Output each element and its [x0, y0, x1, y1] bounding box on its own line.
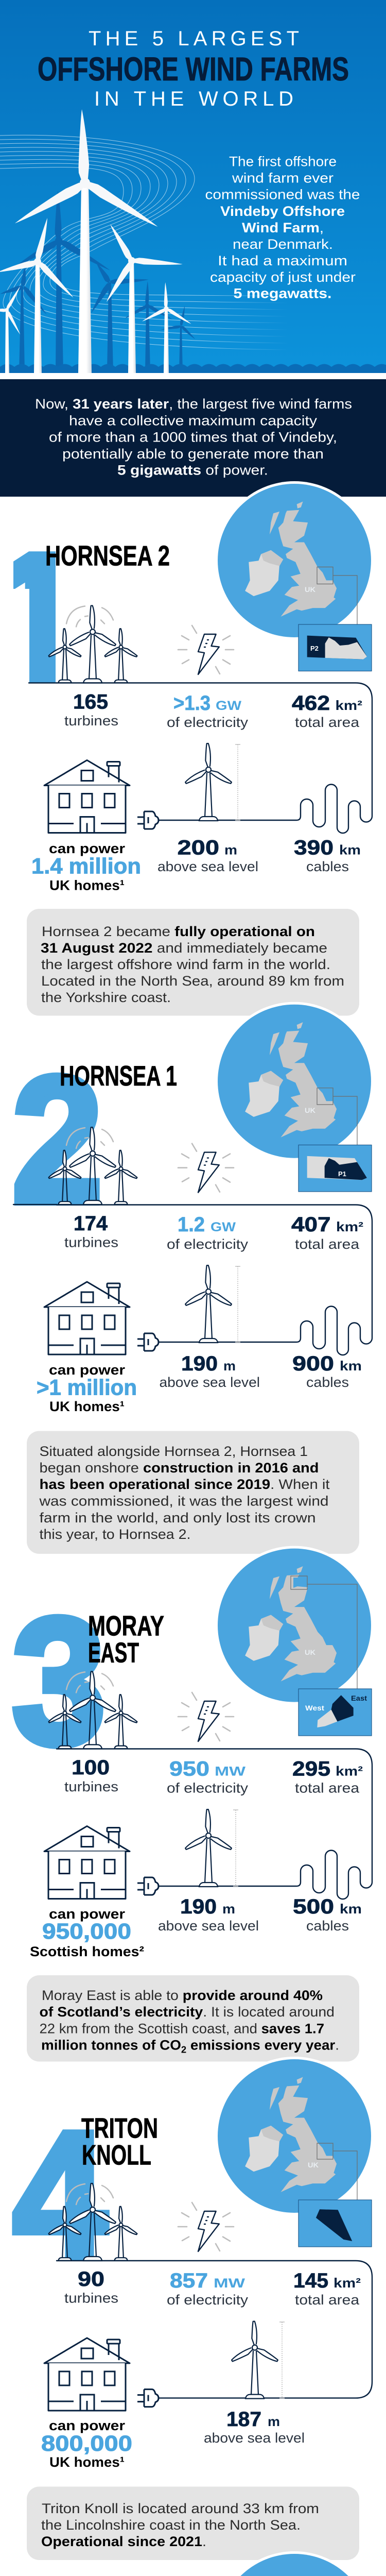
section 3: Moray East	[12, 1546, 374, 1959]
icon: single turbine with height bar	[184, 1809, 238, 1887]
hero text: first offshore wind farm: Vindeby Offshore	[220, 204, 345, 219]
icon: plug	[137, 1333, 159, 1351]
stat: height: above sea level	[160, 1375, 260, 1390]
hero text: first offshore wind farm: The first offshore	[229, 154, 337, 169]
intro text: have a collective maximum capacity	[69, 413, 318, 429]
map: Netherlands	[240, 2551, 348, 2576]
stat: area	[292, 1758, 363, 1796]
text box: Moray East: 2	[181, 2045, 186, 2055]
top line	[13, 1204, 57, 1205]
big numeral 2: 2	[12, 1039, 103, 1241]
icon: lightning	[178, 1692, 234, 1741]
text box: Triton Knoll: Operational since 2021 .	[41, 2534, 206, 2549]
icon: plug	[137, 1877, 159, 1895]
stat: turbines: 90	[78, 2268, 104, 2291]
text box: Hornsea 2: the Yorkshire coast.	[41, 990, 171, 1005]
text box: Moray East: .	[335, 2038, 339, 2053]
icon: turbines	[48, 1671, 138, 1749]
hero text: first offshore wind farm: commissioned was the	[205, 187, 360, 202]
section 1: Hornsea 2	[0, 481, 374, 893]
text box: Hornsea 2	[27, 909, 359, 1016]
stat: turbines	[64, 2268, 118, 2306]
stat: cables: cables	[306, 1375, 349, 1390]
stat: homes: 1.4 million	[31, 854, 141, 878]
text box: Hornsea 2: Hornsea 2 became fully operational on	[42, 924, 315, 939]
hero text: first offshore wind farm: capacity of just under	[210, 269, 356, 285]
icon: lightning	[178, 1144, 234, 1193]
map: UK: UK	[305, 585, 315, 594]
stat: cables: km	[340, 1358, 362, 1374]
hero text: first offshore wind farm: Wind Farm ,	[242, 220, 324, 235]
heading: TRITON	[81, 2112, 158, 2144]
stat: homes: >1 million	[37, 1376, 137, 1400]
stat: homes	[30, 1906, 144, 1959]
text box: Hornsea 2: the largest offshore wind farm in the world.	[41, 957, 330, 972]
heading: EAST	[88, 1636, 139, 1668]
icon: house	[44, 1282, 130, 1354]
stat: height: above sea level	[158, 1918, 259, 1934]
section 4: Triton Knoll	[13, 2057, 374, 2470]
stat: turbines: 165	[73, 690, 108, 713]
stat: height: m	[224, 842, 237, 858]
stat: homes: can power	[49, 2418, 126, 2433]
stat: area: total area	[295, 715, 360, 730]
text box: Hornsea 1	[27, 1431, 359, 1554]
text box: Hornsea 1: was commissioned, it was the largest wind	[39, 1493, 328, 1509]
stat: homes: can power	[49, 1362, 126, 1378]
icon: house	[44, 760, 130, 833]
stat: electricity: of electricity	[167, 1781, 249, 1796]
cable	[57, 2261, 372, 2398]
icon: house	[44, 1826, 130, 1899]
stat: homes: 800,000	[41, 2431, 132, 2456]
map: UK: UK	[305, 1106, 315, 1114]
stat: height: 190	[181, 1352, 218, 1375]
title	[38, 27, 349, 110]
stat: area: total area	[295, 1781, 360, 1796]
heading	[88, 1609, 164, 1668]
stat: cables	[293, 1895, 362, 1934]
heading: HORNSEA 1	[60, 1060, 177, 1092]
hero text: first offshore wind farm: 5 megawatts.	[234, 286, 331, 301]
stat: turbines: turbines	[64, 1234, 118, 1250]
stat: homes	[41, 2418, 132, 2470]
inset: Triton Knoll	[299, 2200, 372, 2247]
inset: Moray East and West: East	[351, 1694, 367, 1702]
map: UK: UK	[308, 2161, 319, 2169]
stat: area: total area	[295, 2292, 360, 2308]
stat: homes: 950,000	[42, 1919, 131, 1944]
stat: electricity	[167, 1758, 249, 1796]
inset: Moray East and West	[299, 1689, 372, 1736]
stat: area: total area	[295, 1236, 360, 1252]
stat: homes: can power	[49, 1906, 126, 1922]
stat: cables: cables	[306, 1918, 349, 1934]
text box: Hornsea 1: has been operational since 2019 . When it	[39, 1477, 330, 1492]
cable	[57, 1205, 372, 1355]
stat: cables: 900	[292, 1352, 334, 1375]
section 2: Hornsea 1	[12, 1002, 374, 1414]
stat: electricity: 1.2	[178, 1213, 205, 1236]
stat: homes: UK homes¹	[49, 878, 125, 893]
stat: electricity: 857	[170, 2269, 208, 2292]
stat: turbines	[64, 1212, 118, 1250]
text box: Hornsea 2: 31 August 2022 and immediately became	[41, 940, 327, 956]
stat: homes	[37, 1362, 137, 1414]
title: THE 5 LARGEST	[89, 27, 299, 50]
title: IN THE WORLD	[94, 88, 293, 110]
text box: Hornsea 1: this year, to Hornsea 2.	[39, 1527, 190, 1542]
hero text: first offshore wind farm	[205, 154, 360, 301]
stat: homes: can power	[49, 841, 126, 856]
foreground white turbines	[0, 109, 192, 373]
intro text: 5 gigawatts of power.	[117, 462, 268, 478]
stat: height	[204, 2408, 305, 2446]
icon: lightning	[178, 625, 234, 674]
hero text: first offshore wind farm: near Denmark.	[233, 236, 333, 252]
stat: electricity: of electricity	[167, 715, 249, 730]
stat: homes: Scottish homes²	[30, 1944, 144, 1959]
stat: cables	[292, 1352, 362, 1390]
stat: homes	[31, 841, 141, 893]
icon: single turbine with height bar	[184, 1265, 240, 1343]
big numeral 3: 3	[12, 1581, 106, 1782]
stat: electricity	[167, 1213, 249, 1252]
map: UK	[215, 1002, 374, 1161]
dark intro band	[0, 379, 386, 497]
big numeral 4: 4	[13, 2094, 108, 2296]
inset: Moray East and West: West	[305, 1704, 324, 1712]
intro text	[35, 396, 352, 478]
stat: height	[158, 1895, 259, 1934]
stat: height: m	[223, 1358, 236, 1374]
map: UK	[215, 2057, 374, 2215]
background turbines	[0, 191, 196, 372]
text box: Moray East: of Scotland’s electricity . It is located around	[39, 2004, 335, 2020]
stat: height: above sea level	[157, 859, 258, 874]
text box: Moray East: emissions every year	[186, 2038, 336, 2053]
intro text: of more than a 1000 times that of Vindeby,	[49, 430, 337, 445]
stat: area	[293, 2269, 361, 2308]
stat: electricity: GW	[216, 699, 241, 713]
heading: HORNSEA 2	[45, 540, 170, 572]
icon: plug	[137, 811, 159, 829]
stat: height: above sea level	[204, 2430, 305, 2446]
stat: area: km²	[334, 2275, 361, 2291]
icon: turbines	[48, 2183, 138, 2261]
hero panel: blue background with turbines	[0, 0, 386, 373]
stat: turbines: 174	[74, 1212, 108, 1235]
icon: turbines	[48, 605, 138, 683]
text box: Moray East: million tonnes of CO	[41, 2038, 181, 2053]
stat: electricity: >1.3	[173, 692, 210, 715]
inset: P2: P2	[310, 645, 319, 652]
icon: lightning	[178, 2202, 234, 2251]
stat: homes: UK homes¹	[49, 2454, 125, 2470]
text box: Triton Knoll	[27, 2486, 359, 2560]
heading	[81, 2112, 158, 2171]
text box: Hornsea 2: Located in the North Sea, around 89 km from	[41, 973, 344, 989]
top line	[29, 682, 57, 684]
decorative wind lines	[0, 135, 288, 350]
stat: area: 462	[292, 692, 330, 715]
stat: electricity: 950	[169, 1758, 209, 1781]
icon: turbines	[48, 1127, 138, 1205]
stat: cables: cables	[306, 859, 349, 874]
map: UK: UK	[305, 1648, 315, 1656]
stat: height: 200	[177, 837, 219, 859]
stat: cables: km	[340, 1901, 362, 1917]
icon: single turbine with height bar	[184, 743, 240, 821]
text box: Triton Knoll: Triton Knoll is located around 33 km from	[42, 2501, 319, 2516]
stat: height	[160, 1352, 260, 1390]
stat: turbines: 100	[72, 1756, 110, 1779]
stat: height: 190	[180, 1895, 217, 1918]
stat: area	[291, 1213, 363, 1252]
stat: area: 295	[292, 1758, 330, 1781]
stat: electricity: of electricity	[167, 2292, 249, 2308]
stat: turbines: turbines	[64, 1779, 118, 1794]
inset: P1: P1	[338, 1170, 346, 1178]
stat: area: 407	[291, 1213, 331, 1236]
stat: area: km²	[336, 698, 362, 713]
map: UK	[215, 1546, 374, 1705]
inset: P2	[299, 624, 372, 671]
stat: area: 145	[293, 2269, 328, 2292]
stat: cables: km	[339, 842, 361, 858]
text box: Moray East	[27, 1975, 359, 2062]
wave strip	[0, 364, 386, 373]
stat: cables	[294, 837, 361, 874]
inset: P1	[299, 1145, 372, 1192]
stat: cables: 390	[294, 837, 334, 859]
stat: electricity	[167, 2269, 249, 2308]
map: UK	[215, 481, 374, 640]
stat: electricity: of electricity	[167, 1236, 249, 1252]
stat: height: m	[268, 2414, 280, 2429]
stat: turbines	[64, 690, 118, 728]
stat: turbines: turbines	[64, 713, 118, 728]
text box: Moray East: 22 km from the Scottish coast, and saves 1.7	[39, 2021, 324, 2036]
text box: Moray East: Moray East is able to provide around 40%	[42, 1988, 323, 2003]
hero text: first offshore wind farm: It had a maximum	[218, 253, 347, 268]
section 5: Borssele 1&2	[240, 2551, 348, 2576]
stat: area: km²	[336, 1219, 363, 1234]
heading: MORAY	[88, 1609, 164, 1641]
hero text: first offshore wind farm: wind farm ever	[232, 171, 334, 186]
stat: homes: UK homes¹	[49, 1399, 125, 1414]
stat: height: 187	[226, 2408, 261, 2431]
stat: electricity	[167, 692, 249, 730]
cable	[57, 1749, 372, 1899]
icon: single turbine with height bar	[231, 2321, 285, 2399]
stat: height	[157, 837, 258, 874]
stat: turbines: turbines	[64, 2290, 118, 2306]
stat: area: km²	[336, 1763, 363, 1778]
text box: Hornsea 1: began onshore construction in 2016 and	[39, 1460, 319, 1476]
text box: Hornsea 1: farm in the world, and only lost its crown	[39, 1510, 316, 1526]
heading: KNOLL	[82, 2139, 151, 2171]
icon: house	[44, 2338, 130, 2411]
icon: plug	[137, 2389, 159, 2407]
stat: electricity: MW	[214, 2276, 245, 2291]
stat: cables: 500	[293, 1895, 334, 1918]
text box: Hornsea 1: Situated alongside Hornsea 2, Hornsea 1	[39, 1444, 308, 1459]
stat: area	[292, 692, 362, 730]
text box: Triton Knoll: the Lincolnshire coast in the North Sea.	[41, 2517, 301, 2533]
stat: electricity: MW	[215, 1764, 246, 1778]
cable	[57, 683, 372, 833]
stat: electricity: GW	[210, 1220, 236, 1234]
stat: turbines	[64, 1756, 118, 1794]
intro text: potentially able to generate more than	[62, 446, 324, 462]
intro text: Now, 31 years later , the largest five wind farms	[35, 396, 352, 412]
stat: height: m	[222, 1901, 235, 1917]
